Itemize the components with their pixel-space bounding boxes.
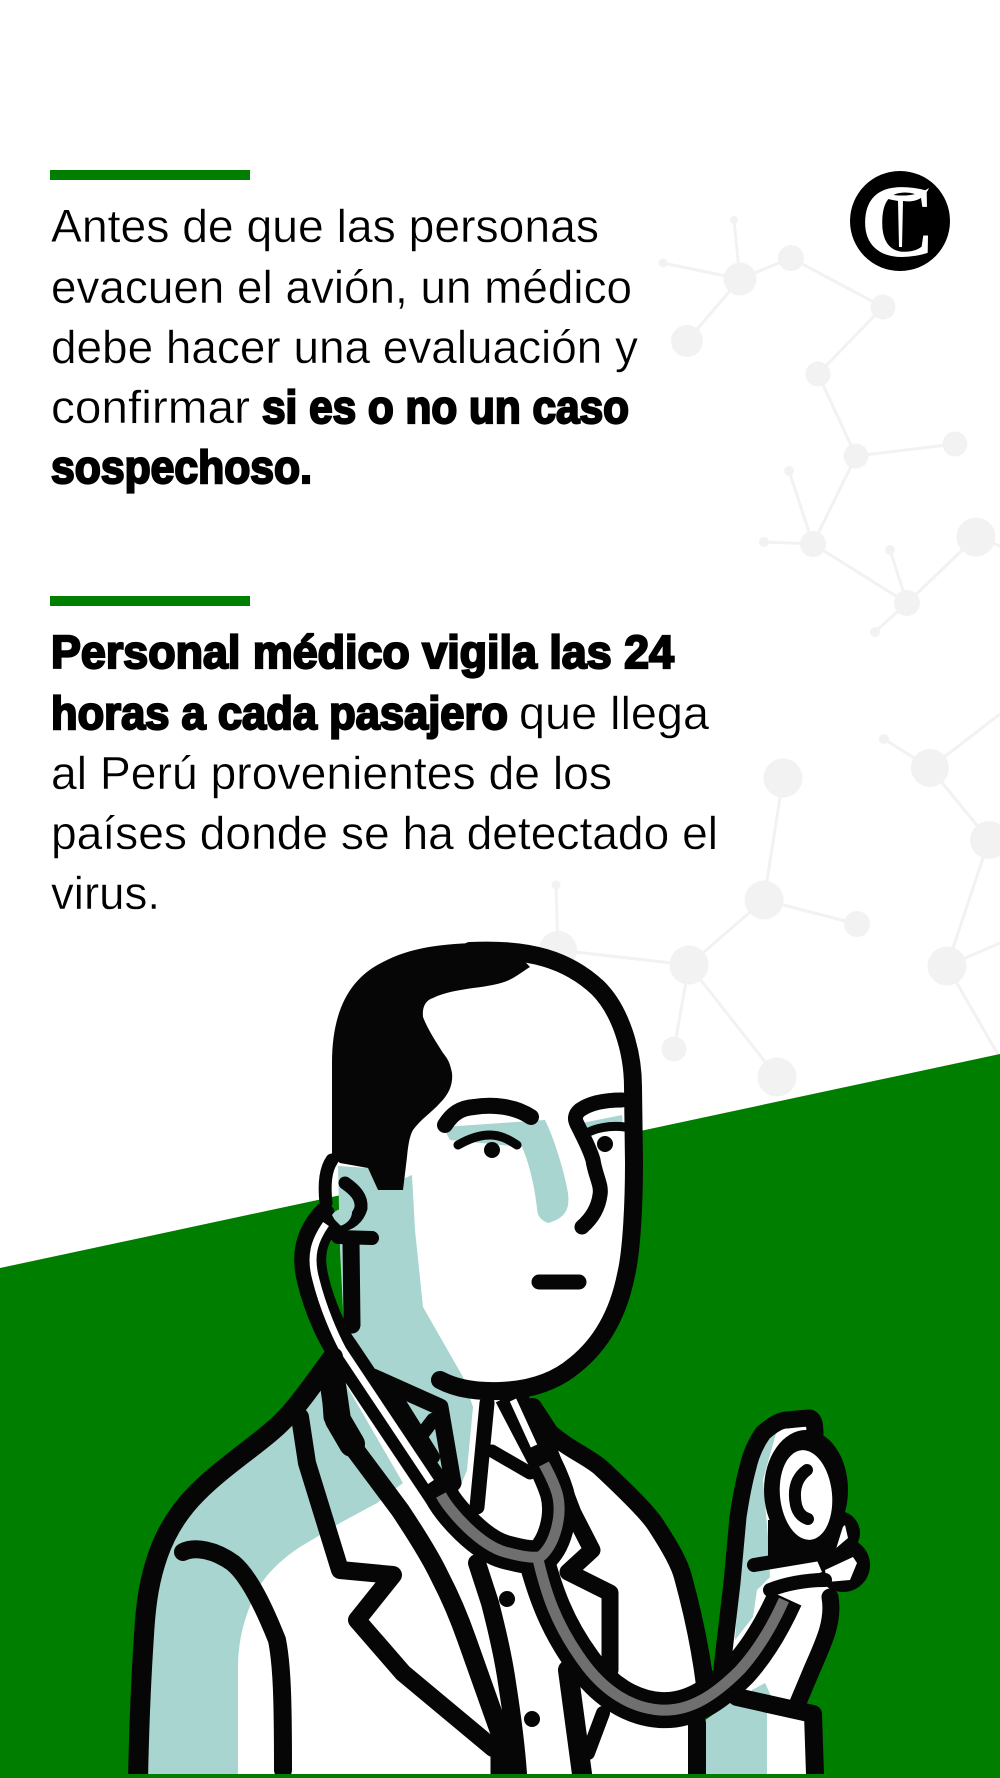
bottom green strip: [0, 1774, 1000, 1778]
illustration: doctor with stethoscope: [138, 943, 870, 1778]
sleeve cuff: [697, 1697, 815, 1774]
stethoscope: grey Y tube and cable: [440, 1460, 785, 1710]
thumb band: [754, 1554, 825, 1590]
text block: first paragraph: debe hacer una evaluación y: [51, 321, 638, 373]
head: face shape: [340, 951, 634, 1391]
hand: white fill: [712, 1418, 831, 1710]
second accent bar: [50, 596, 250, 606]
text block: first paragraph: evacuen el avión, un médico: [51, 261, 632, 313]
text block: second paragraph: que llega: [519, 687, 709, 739]
coat collar line: [330, 1373, 500, 1774]
text block: second paragraph: [51, 626, 718, 919]
text block: second paragraph: virus.: [51, 867, 160, 919]
hand shading: [735, 1430, 777, 1700]
nose and eye shading: [443, 1115, 623, 1223]
background molecule: lower: [539, 714, 1000, 1096]
shirt placket line and buttons: [477, 1563, 603, 1774]
fingers: [722, 1418, 870, 1705]
text block: second paragraph: horas a cada pasajero: [51, 687, 508, 739]
stethoscope chestpiece: [764, 1430, 848, 1562]
right lapel: [550, 1453, 610, 1670]
coat: white body: [138, 1357, 705, 1774]
first accent bar: [50, 170, 250, 180]
stethoscope tube: right: [510, 1395, 545, 1462]
text block: first paragraph: si es o no un caso: [262, 381, 629, 433]
text block: first paragraph: [51, 200, 638, 493]
face: brows, eyes, nose and mouth: [445, 1100, 625, 1282]
collar and tie lines: [373, 1377, 530, 1507]
text block: second paragraph: países donde se ha detectado el: [51, 807, 718, 859]
green diagonal background: [0, 1054, 1000, 1778]
text block: second paragraph: al Perú provenientes de los: [51, 747, 612, 799]
left lapel: [300, 1417, 493, 1748]
text block: first paragraph: Antes de que las personas: [51, 200, 599, 252]
shoulder and sleeve shading: [138, 1362, 403, 1774]
ear: [325, 1160, 372, 1325]
head outline: [440, 951, 634, 1391]
text block: first paragraph: confirmar: [51, 381, 250, 433]
stethoscope tube: left: [310, 1215, 440, 1495]
coat outlines: [138, 1357, 705, 1778]
background molecule: upper: [658, 216, 1000, 637]
neck shading: [338, 1166, 473, 1500]
logo: El Comercio C badge: C: [860, 164, 936, 279]
text block: first paragraph: sospechoso.: [51, 441, 312, 493]
text block: second paragraph: Personal médico vigila las 24: [51, 626, 674, 678]
left arm line: [183, 1549, 283, 1770]
hair: [332, 943, 530, 1190]
